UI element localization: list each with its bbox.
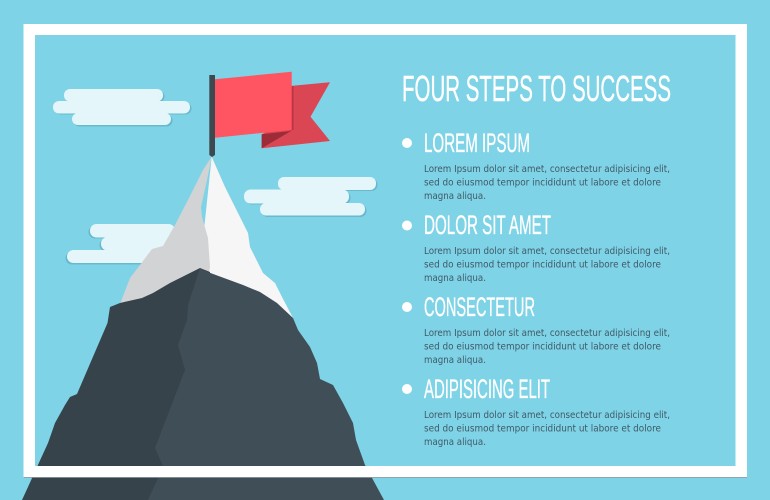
step 3 body: Lorem Ipsum dolor sit amet, consectetur adipisicing elit, [424, 328, 670, 339]
flag pole [209, 75, 215, 157]
step 3 [402, 292, 670, 366]
flag edge shadow [289, 86, 294, 132]
step 4 body: magna aliqua. [424, 437, 486, 448]
step 1 body: sed do eiusmod tempor incididunt ut labore et dolore [424, 178, 661, 188]
flag tail [262, 82, 330, 148]
step 2 heading: DOLOR SIT AMET [424, 210, 551, 240]
cloud: right of peak [244, 177, 378, 217]
cloud: upper left [53, 89, 192, 126]
cloud: behind mountain [66, 224, 186, 264]
flag front [215, 72, 292, 138]
step 2 [402, 210, 670, 284]
step 1 [402, 128, 670, 202]
bullet 4 [402, 384, 412, 394]
step 4 body [424, 410, 670, 448]
step 2 body: magna aliqua. [424, 273, 486, 284]
step 4 body: Lorem Ipsum dolor sit amet, consectetur adipisicing elit, [424, 410, 670, 421]
step 1 heading: LOREM IPSUM [424, 128, 530, 158]
step 2 body [424, 246, 670, 284]
bullet 3 [402, 302, 412, 312]
mountain [22, 157, 384, 500]
lit rock face [148, 268, 384, 500]
dark rock face [22, 268, 210, 500]
step 3 body: magna aliqua. [424, 355, 486, 366]
step 4 body: sed do eiusmod tempor incididunt ut labore et dolore [424, 424, 661, 434]
step 2 body: sed do eiusmod tempor incididunt ut labore et dolore [424, 260, 661, 270]
bullet 1 [402, 138, 412, 148]
step 1 body: Lorem Ipsum dolor sit amet, consectetur adipisicing elit, [424, 164, 670, 175]
step 4 [402, 374, 670, 448]
flag [209, 72, 330, 157]
step 3 body [424, 328, 670, 366]
step 1 body [424, 164, 670, 202]
bullet 2 [402, 220, 412, 230]
step 3 body: sed do eiusmod tempor incididunt ut labore et dolore [424, 342, 661, 352]
snow cap [120, 157, 293, 320]
flag fold shadow [262, 131, 291, 148]
step 2 body: Lorem Ipsum dolor sit amet, consectetur adipisicing elit, [424, 246, 670, 257]
step 1 body: magna aliqua. [424, 191, 486, 202]
step 4 heading: ADIPISICING ELIT [424, 374, 550, 404]
step 3 heading: CONSECTETUR [424, 292, 535, 322]
